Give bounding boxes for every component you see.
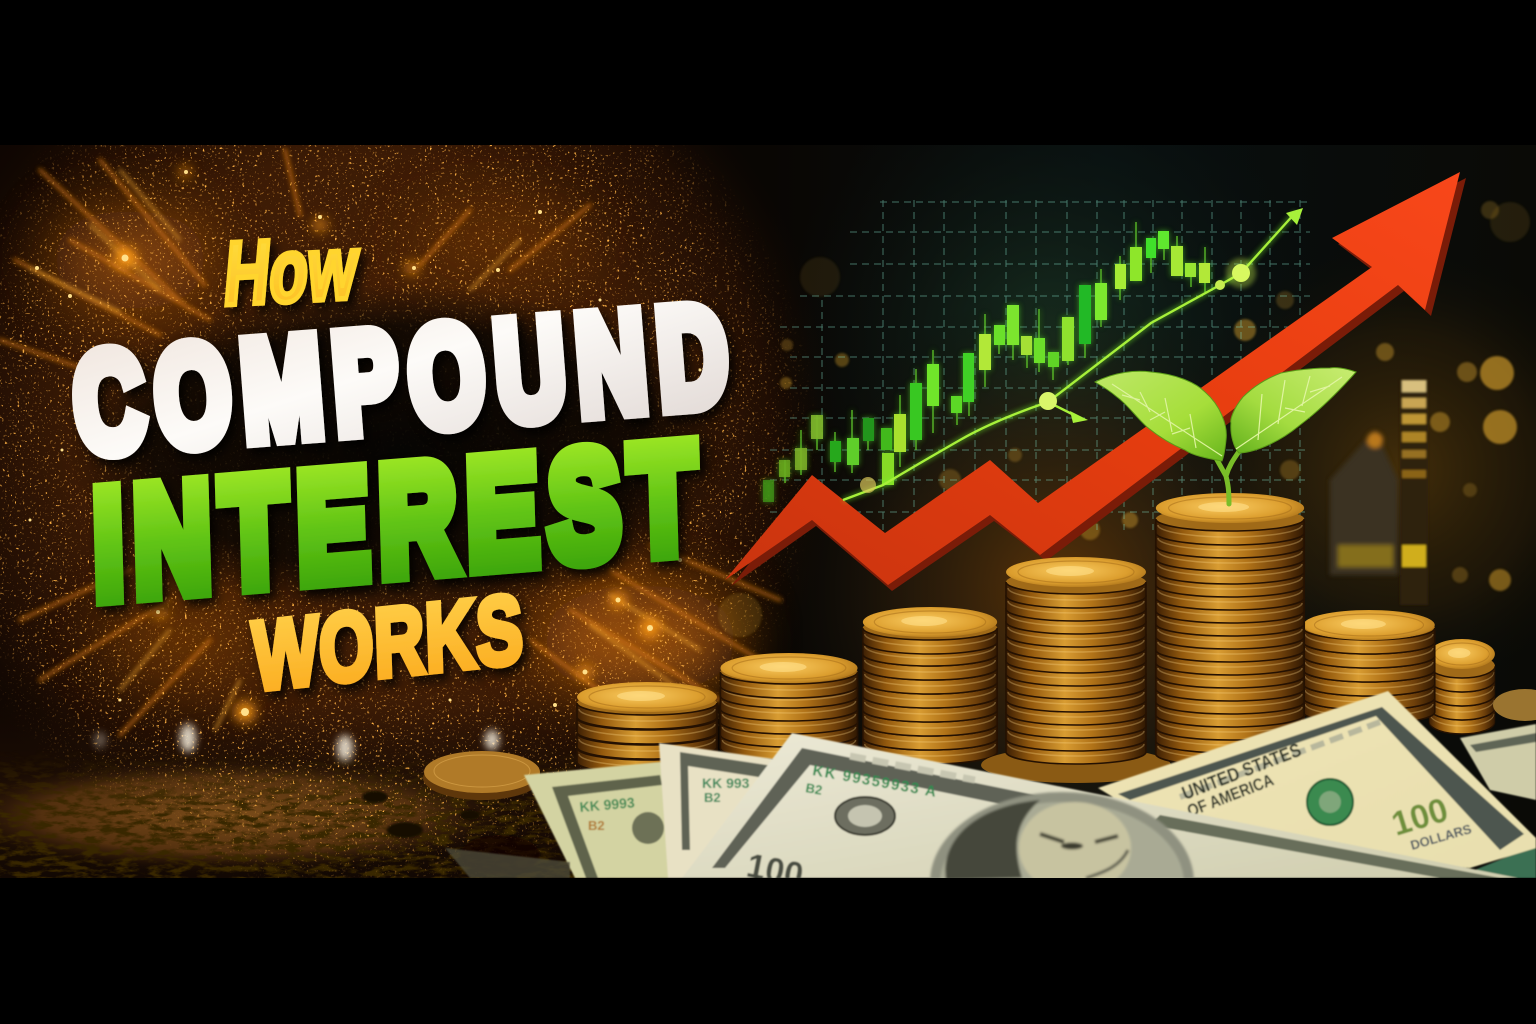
centre bill with portrait: [682, 733, 1518, 972]
stack 2: [720, 653, 858, 760]
serial number: KK 99359933 A: [811, 762, 939, 801]
stack 4: [981, 557, 1171, 783]
dollar banknotes: [445, 690, 1536, 878]
panel: main banner artwork: [0, 145, 1536, 878]
chart: green candlesticks: [763, 222, 1210, 502]
skyline tower: [1400, 380, 1428, 605]
stack 5: [1156, 493, 1304, 766]
background scene: [0, 145, 1536, 878]
heading word: WORKS: WORKS: [251, 573, 525, 711]
stack 7: [1429, 639, 1495, 734]
bokeh lights and city skyline: [718, 201, 1530, 637]
centre bill with portrait: B2: [804, 780, 823, 798]
glowing spark points: [28, 167, 702, 761]
treasury text: UNITED STATES: [1179, 739, 1304, 804]
second left bill: [658, 742, 774, 878]
value numerals: 100: [1387, 791, 1453, 844]
loose coin on ground: [423, 751, 541, 800]
green growth trend line: [843, 208, 1303, 500]
right bill: DOLLARS: [1409, 821, 1474, 853]
bottom numerals: 100: [743, 847, 806, 895]
far right bill: [1455, 724, 1536, 878]
left leaf: [1095, 371, 1226, 461]
heading word: INTEREST: INTEREST: [91, 411, 709, 632]
heading word: How: How: [220, 216, 362, 325]
stack 3: [863, 607, 997, 764]
red rising arrow: [725, 172, 1466, 591]
skyline building: [1330, 430, 1398, 575]
light streaks radiating from the title: [0, 150, 780, 735]
scattered bill on ground: [445, 848, 570, 878]
ground rocks and debris: [360, 790, 540, 861]
icon: green sprout: [1095, 368, 1356, 504]
portrait medallion: [930, 792, 1194, 972]
right bill: OF AMERICA: [1185, 771, 1276, 821]
right edge coin: [1493, 689, 1536, 721]
stack 6: [1303, 610, 1435, 724]
title text: [68, 216, 745, 711]
second left bill: KK 993: [702, 775, 750, 791]
left bill: [524, 762, 702, 878]
federal reserve seal: [835, 797, 895, 835]
dark backing behind title: [75, 287, 724, 611]
green treasury seal: [1307, 779, 1353, 825]
right leaf: [1231, 368, 1356, 453]
coin stacks: [423, 493, 1536, 800]
right bill: [1098, 691, 1536, 868]
left bill: KK 9993: [579, 794, 636, 815]
sparks speckle texture: [0, 145, 900, 878]
second left bill: B2: [704, 790, 721, 805]
soft orange glows around the title: [50, 205, 740, 695]
stack 1: [577, 682, 717, 774]
left bill: B2: [588, 818, 605, 833]
chart grid: [770, 200, 1310, 530]
heading word: COMPOUND: COMPOUND: [68, 275, 745, 483]
